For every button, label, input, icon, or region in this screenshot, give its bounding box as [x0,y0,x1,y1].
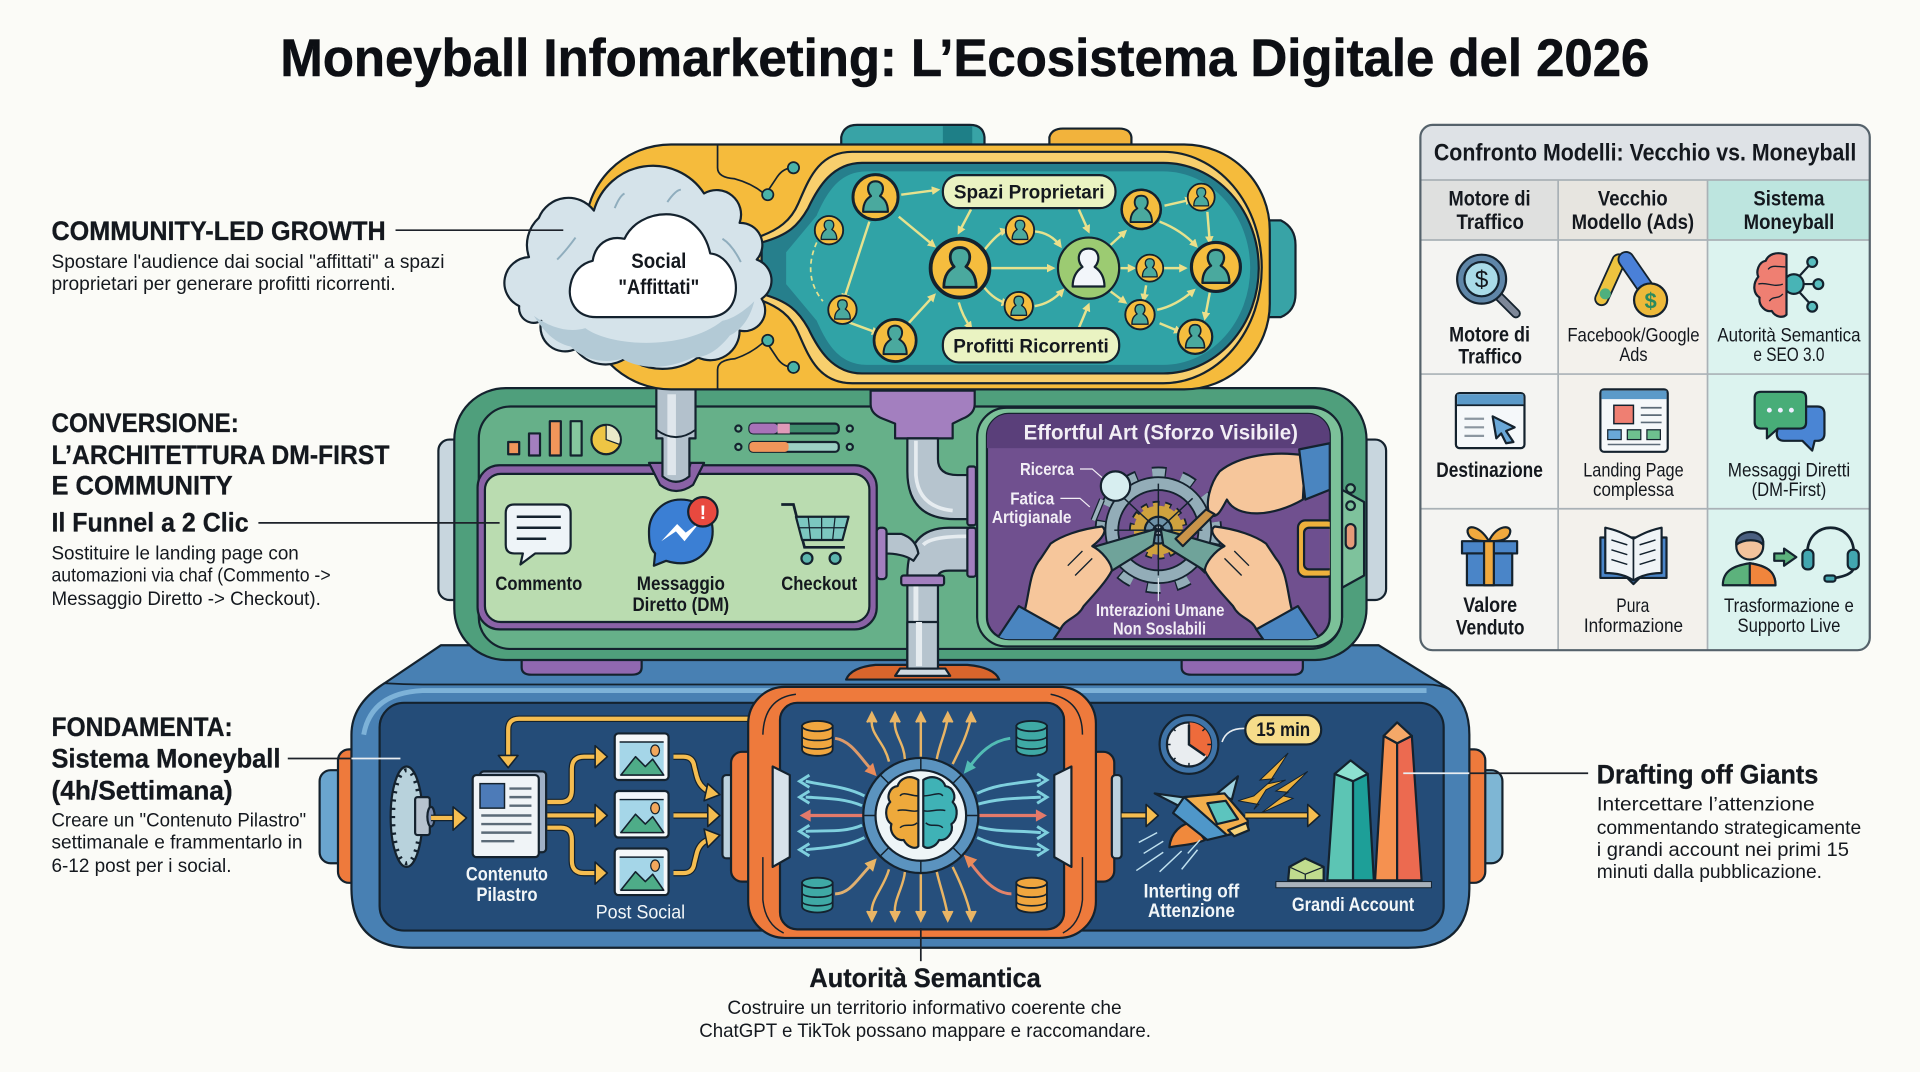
arrow: gear to document [431,807,467,830]
dashed link [811,242,823,301]
text block: drafting off giants: Drafting off Giants [1597,760,1818,790]
arrow: core to ship [1122,804,1158,826]
panel: effortful art [977,408,1342,649]
label: Messaggi Diretti: (DM-First) [1752,480,1826,501]
icon: ads logo with coin [1600,260,1667,317]
label: Interting off Attenzione: Attenzione [1148,901,1235,922]
pill: Profitti Ricorrenti [943,328,1119,362]
label: Destinazione: Destinazione [1436,458,1543,482]
label: Motore di Traffico: Traffico [1458,345,1522,369]
label: Facebook/Google Ads [1567,326,1700,366]
inner frame [757,152,1262,383]
vertical arrows [867,713,976,921]
arrows: document to posts [547,746,607,884]
text block: fondamenta: FONDAMENTA: [51,712,233,742]
label: Landing Page complessa: Landing Page [1583,460,1684,481]
table cells [1420,125,1870,650]
heading: Effortful Art: Effortful Art (Sforzo Visibile) [1024,421,1298,445]
icon: messenger: ! [700,502,706,524]
text block: community-led growth [51,216,445,295]
gear wheel [391,767,435,867]
icon: gift [1462,527,1517,585]
top right hand [1176,443,1330,546]
column header 2 [1572,187,1694,234]
indicator lights [1346,484,1355,549]
text block: drafting off giants [1597,760,1861,883]
text block: conversione: Messaggio Diretto -> Checkout). [51,589,321,610]
blue chassis [351,645,1469,948]
teal network panel [762,163,1259,373]
column header 2: Vecchio [1598,187,1668,211]
text block: fondamenta [51,712,306,877]
network nodes [815,175,1240,361]
leader: semantic authority line [920,928,922,961]
column header 1 [1449,187,1531,234]
label: Landing Page complessa [1583,460,1684,501]
icon: lightning [1238,753,1308,813]
label: Trasformazione e Supporto Live: Supporto Live [1738,616,1840,637]
label: Messaggi Diretti [1728,460,1850,501]
panel: bottom foundation unit [320,645,1502,948]
pipes: right manifold [871,391,976,676]
label: Interazioni Umane: Interazioni Umane [1096,600,1224,620]
icon: search dollar [1457,255,1516,313]
icon: social post 3 [615,849,669,895]
top knobs [841,125,1131,149]
icon: cart [781,504,849,564]
label: Facebook/Google Ads: Facebook/Google [1567,326,1700,347]
label: Fatica Artigianale [992,488,1090,527]
label: Valore Venduto: Venduto [1456,615,1524,639]
column header 1: Traffico [1457,210,1524,234]
icon: rented social cloud [504,166,772,369]
label: Pura Informazione [1584,596,1683,637]
yellow chassis [585,144,1270,389]
icon: browser cursor [1456,393,1524,448]
text block: fondamenta: Creare un "Contenuto Pilastro" [51,810,306,831]
icon: pillar document [473,771,546,857]
arrow: feedback loop [498,719,749,768]
icon: clock [1160,715,1218,774]
text block: community-led growth: Spostare l'audience dai social "affittati" a spazi [51,252,445,273]
database icon teal left [802,878,833,913]
text block: fondamenta: Sistema Moneyball [51,744,280,774]
text block: conversione: L’ARCHITETTURA DM-FIRST [51,440,390,470]
text block: conversione: E COMMUNITY [51,471,233,501]
table title: Confronto Modelli: Vecchio vs. Moneyball [1434,139,1856,166]
text block: fondamenta: (4h/Settimana) [51,776,233,806]
purple collar [871,391,975,438]
label: Messaggio Diretto [632,574,729,616]
icon: brain network [1754,253,1823,317]
leader: funnel line [258,522,500,524]
cloud label: Social [631,250,686,273]
icon: social post 2 [615,791,669,838]
base flange [895,669,950,676]
icon: brain hub [863,758,978,873]
leader: foundation line [288,758,400,760]
leader: community line [396,229,563,231]
text block: conversione [51,408,390,610]
side widget [1298,520,1335,577]
side knobs left [320,749,362,883]
text block: autorità semantica: ChatGPT e TikTok possano mappare e raccomandare. [699,1021,1151,1042]
gear mechanism [1092,475,1224,585]
label: Valore Venduto: Valore [1463,593,1517,617]
panel: top community unit [504,125,1295,389]
label: Messaggio Diretto: Messaggio [637,574,725,595]
text block: conversione: CONVERSIONE: [51,408,239,438]
text block: conversione: automazioni via chaf (Commento -> [51,566,331,587]
text block: fondamenta: settimanale e frammentarlo in [51,833,302,854]
label: Autorità Semantica e SEO 3.0: e SEO 3.0 [1753,345,1824,366]
database icon orange right [1016,878,1047,913]
icon: person to headset [1723,528,1859,585]
panel: comparison table [1420,125,1870,650]
teal inner field [786,171,1250,365]
cloud label [618,250,699,299]
text block: drafting off giants: minuti dalla pubblicazione. [1597,862,1822,883]
label: Valore Venduto [1456,593,1524,639]
text block: autorità semantica [699,963,1151,1042]
label: Landing Page complessa: complessa [1593,480,1674,501]
title: Moneyball Infomarketing: L’Ecosistema Digitale del 2026 [280,29,1649,88]
data streams right [977,774,1047,856]
curved feed arrows [835,738,1011,894]
label: Autorità Semantica e SEO 3.0: Autorità Semantica [1717,326,1861,347]
column header 1: Motore di [1449,187,1531,211]
text block: conversione: Sostituire le landing page con [51,544,299,565]
network links [841,190,1210,333]
label: Interting off Attenzione [1144,882,1240,922]
text block: fondamenta: 6-12 post per i social. [51,856,231,877]
label: Fatica Artigianale: Artigianale [992,507,1071,527]
text block: drafting off giants: commentando strategicamente [1597,818,1861,839]
green chassis [454,388,1367,660]
collars beside core [722,665,1122,882]
icon: direct messages [1755,392,1824,451]
mini bar chart icon [508,421,621,455]
label: Ricerca: Ricerca [1020,459,1074,479]
database icons [802,721,833,756]
label: Commento: Commento [495,574,582,595]
purple feet [522,659,1303,675]
label: Motore di Traffico [1449,323,1530,369]
label: Interazioni Umane [1096,578,1224,638]
upper elbow pipe [907,438,971,519]
icon: open book [1600,528,1667,584]
label: Facebook/Google Ads: Ads [1619,345,1648,366]
bottom right hand [1205,527,1322,649]
callout: 15 min: 15 min [1256,720,1310,741]
panel: middle conversion unit [438,387,1386,676]
label: Interazioni Umane: Non Soslabili [1113,618,1206,638]
panel: semantic core [748,687,1096,938]
icon: search dollar: $ [1475,267,1489,294]
label: Pura Informazione: Informazione [1584,616,1683,637]
label: Checkout: Checkout [781,574,858,595]
cloud label: "Affittati" [618,276,699,299]
side knobs [438,440,1386,600]
label: Autorità Semantica e SEO 3.0 [1717,326,1861,366]
arrow: ship to giants [1245,804,1320,826]
chart: giant towers [1276,722,1431,888]
pipe: cloud to funnel [649,387,704,491]
label: Contenuto Pilastro [466,864,548,906]
pill: Profitti Ricorrenti: Profitti Ricorrenti [953,337,1109,358]
progress bars [735,424,853,452]
label: Motore di Traffico: Motore di [1449,323,1530,347]
navy screen [380,703,1444,931]
text block: autorità semantica: Autorità Semantica [809,963,1042,993]
lower elbow pipe [907,528,971,669]
icon: magnifier [1093,471,1130,520]
column header 2: Modello (Ads) [1572,210,1694,234]
label: Messaggi Diretti: Messaggi Diretti [1728,460,1850,481]
right knob [1261,220,1295,317]
column header 3: Moneyball [1744,210,1834,234]
label: Grandi Account: Grandi Account [1292,895,1415,916]
side stub [884,534,918,561]
database icon teal right [1016,721,1047,756]
label: Interting off Attenzione: Interting off [1144,882,1240,903]
icon: rocket ship [1136,776,1249,872]
icon: ads logo with coin: $ [1644,289,1657,314]
text block: community-led growth: proprietari per generare profitti ricorrenti. [51,274,396,295]
connector plates [773,767,790,867]
icon: messenger [649,497,718,566]
callout: 15 min [1222,715,1321,744]
bottom left hand [994,527,1112,649]
side knobs right [1460,749,1502,883]
column header 3: Sistema [1753,187,1825,211]
icon: landing page [1600,389,1668,452]
panel: 2-click funnel [478,465,877,629]
label: Fatica Artigianale: Fatica [1010,488,1055,508]
label: Contenuto Pilastro: Contenuto [466,864,548,885]
leader: drafting line [1403,772,1588,774]
label: Post Social: Post Social [596,902,685,923]
label: Trasformazione e Supporto Live: Trasformazione e [1724,596,1854,617]
text block: community-led growth: COMMUNITY-LED GROWTH [51,216,386,246]
text block: drafting off giants: i grandi account nei primi 15 [1597,840,1849,861]
pipe: base hub cap [907,622,938,669]
orange frame [748,687,1096,938]
icon: comment [506,504,571,564]
text block: drafting off giants: Intercettare l’attenzione [1597,795,1815,816]
arrows: posts to core [673,757,720,873]
label: Messaggio Diretto: Diretto (DM) [632,595,729,616]
central node [1058,238,1119,299]
text block: conversione: Il Funnel a 2 Clic [51,507,249,537]
label: Pura Informazione: Pura [1616,596,1650,617]
label: Contenuto Pilastro: Pilastro [476,885,538,906]
pill: Spazi Proprietari [943,175,1116,208]
column header 3 [1744,187,1834,234]
circuit traces [718,144,793,389]
label: Trasformazione e Supporto Live [1724,596,1854,637]
icon: social post 1 [615,733,669,780]
text block: autorità semantica: Costruire un territorio informativo coerente che [727,998,1122,1019]
pill: Spazi Proprietari: Spazi Proprietari [954,182,1104,203]
data streams left [800,775,864,856]
